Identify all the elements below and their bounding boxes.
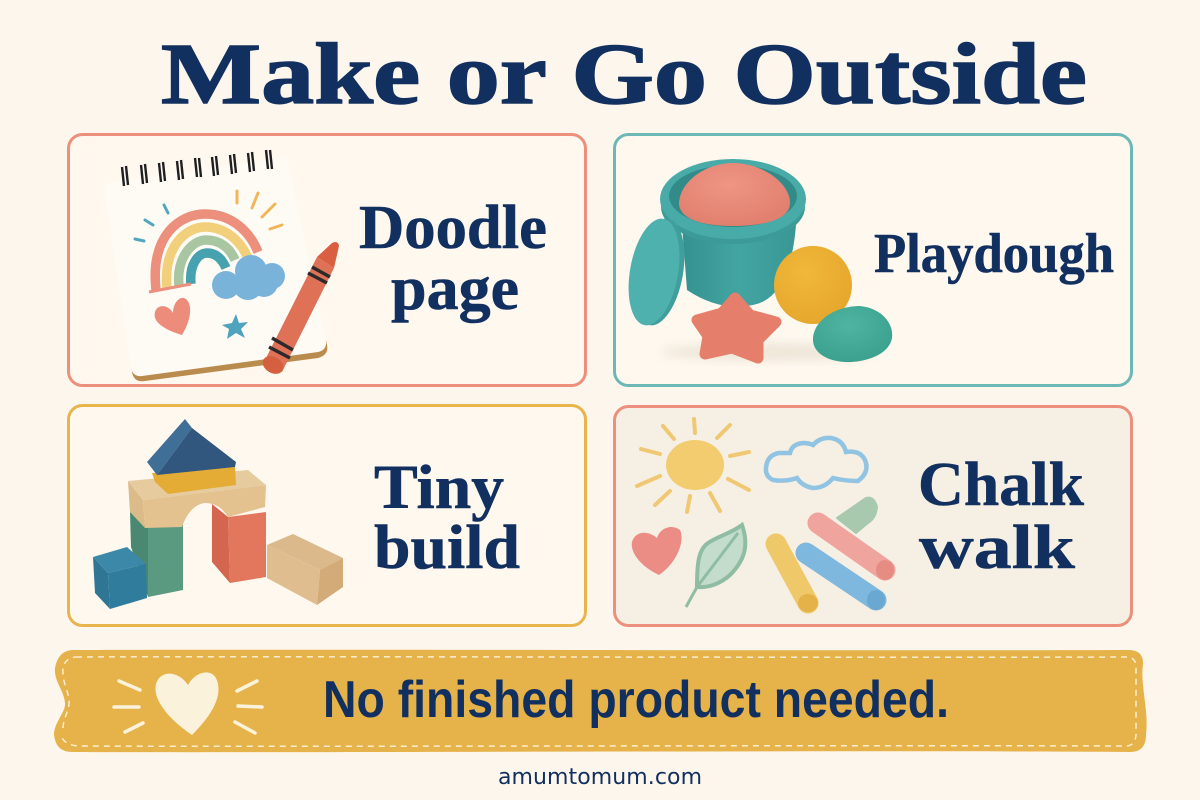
footer url: amumtomum.com	[498, 765, 702, 790]
sun	[666, 440, 724, 490]
roof	[147, 419, 192, 475]
label: Doodle	[359, 194, 547, 262]
panel: tiny build: build	[374, 514, 520, 582]
icon: wooden blocks	[93, 419, 343, 609]
cloud	[212, 255, 285, 300]
cloud	[766, 438, 866, 488]
icon: chalk heart with rays	[114, 672, 262, 735]
label: Chalk	[918, 451, 1085, 519]
leaf	[697, 525, 745, 587]
red block	[212, 504, 230, 583]
panel: playdough	[614, 134, 1132, 386]
rainbow	[155, 214, 258, 290]
panel: chalk walk: walk	[919, 514, 1076, 582]
label: Playdough	[874, 223, 1114, 285]
heart	[155, 298, 190, 335]
yellow block	[152, 467, 236, 494]
panel: doodle page: page	[391, 255, 519, 323]
icon: notebook with rainbow and crayon	[105, 150, 339, 381]
crayon	[259, 242, 339, 377]
icon: chalk drawings and sticks	[632, 419, 894, 612]
panel: doodle page	[68, 134, 586, 386]
banner	[54, 650, 1147, 752]
label: Tiny	[374, 454, 504, 522]
panel: chalk walk	[614, 406, 1132, 626]
chalk sticks	[837, 498, 877, 533]
panel: tiny build	[68, 406, 586, 626]
wood block	[267, 534, 343, 570]
icon: playdough tub, star and balls	[621, 159, 892, 362]
heart	[632, 527, 682, 575]
arch	[128, 481, 145, 528]
blue cube	[93, 557, 110, 609]
title: Make or Go Outside	[161, 25, 1087, 122]
banner text: No finished product needed.	[323, 671, 949, 729]
green block	[130, 512, 148, 597]
